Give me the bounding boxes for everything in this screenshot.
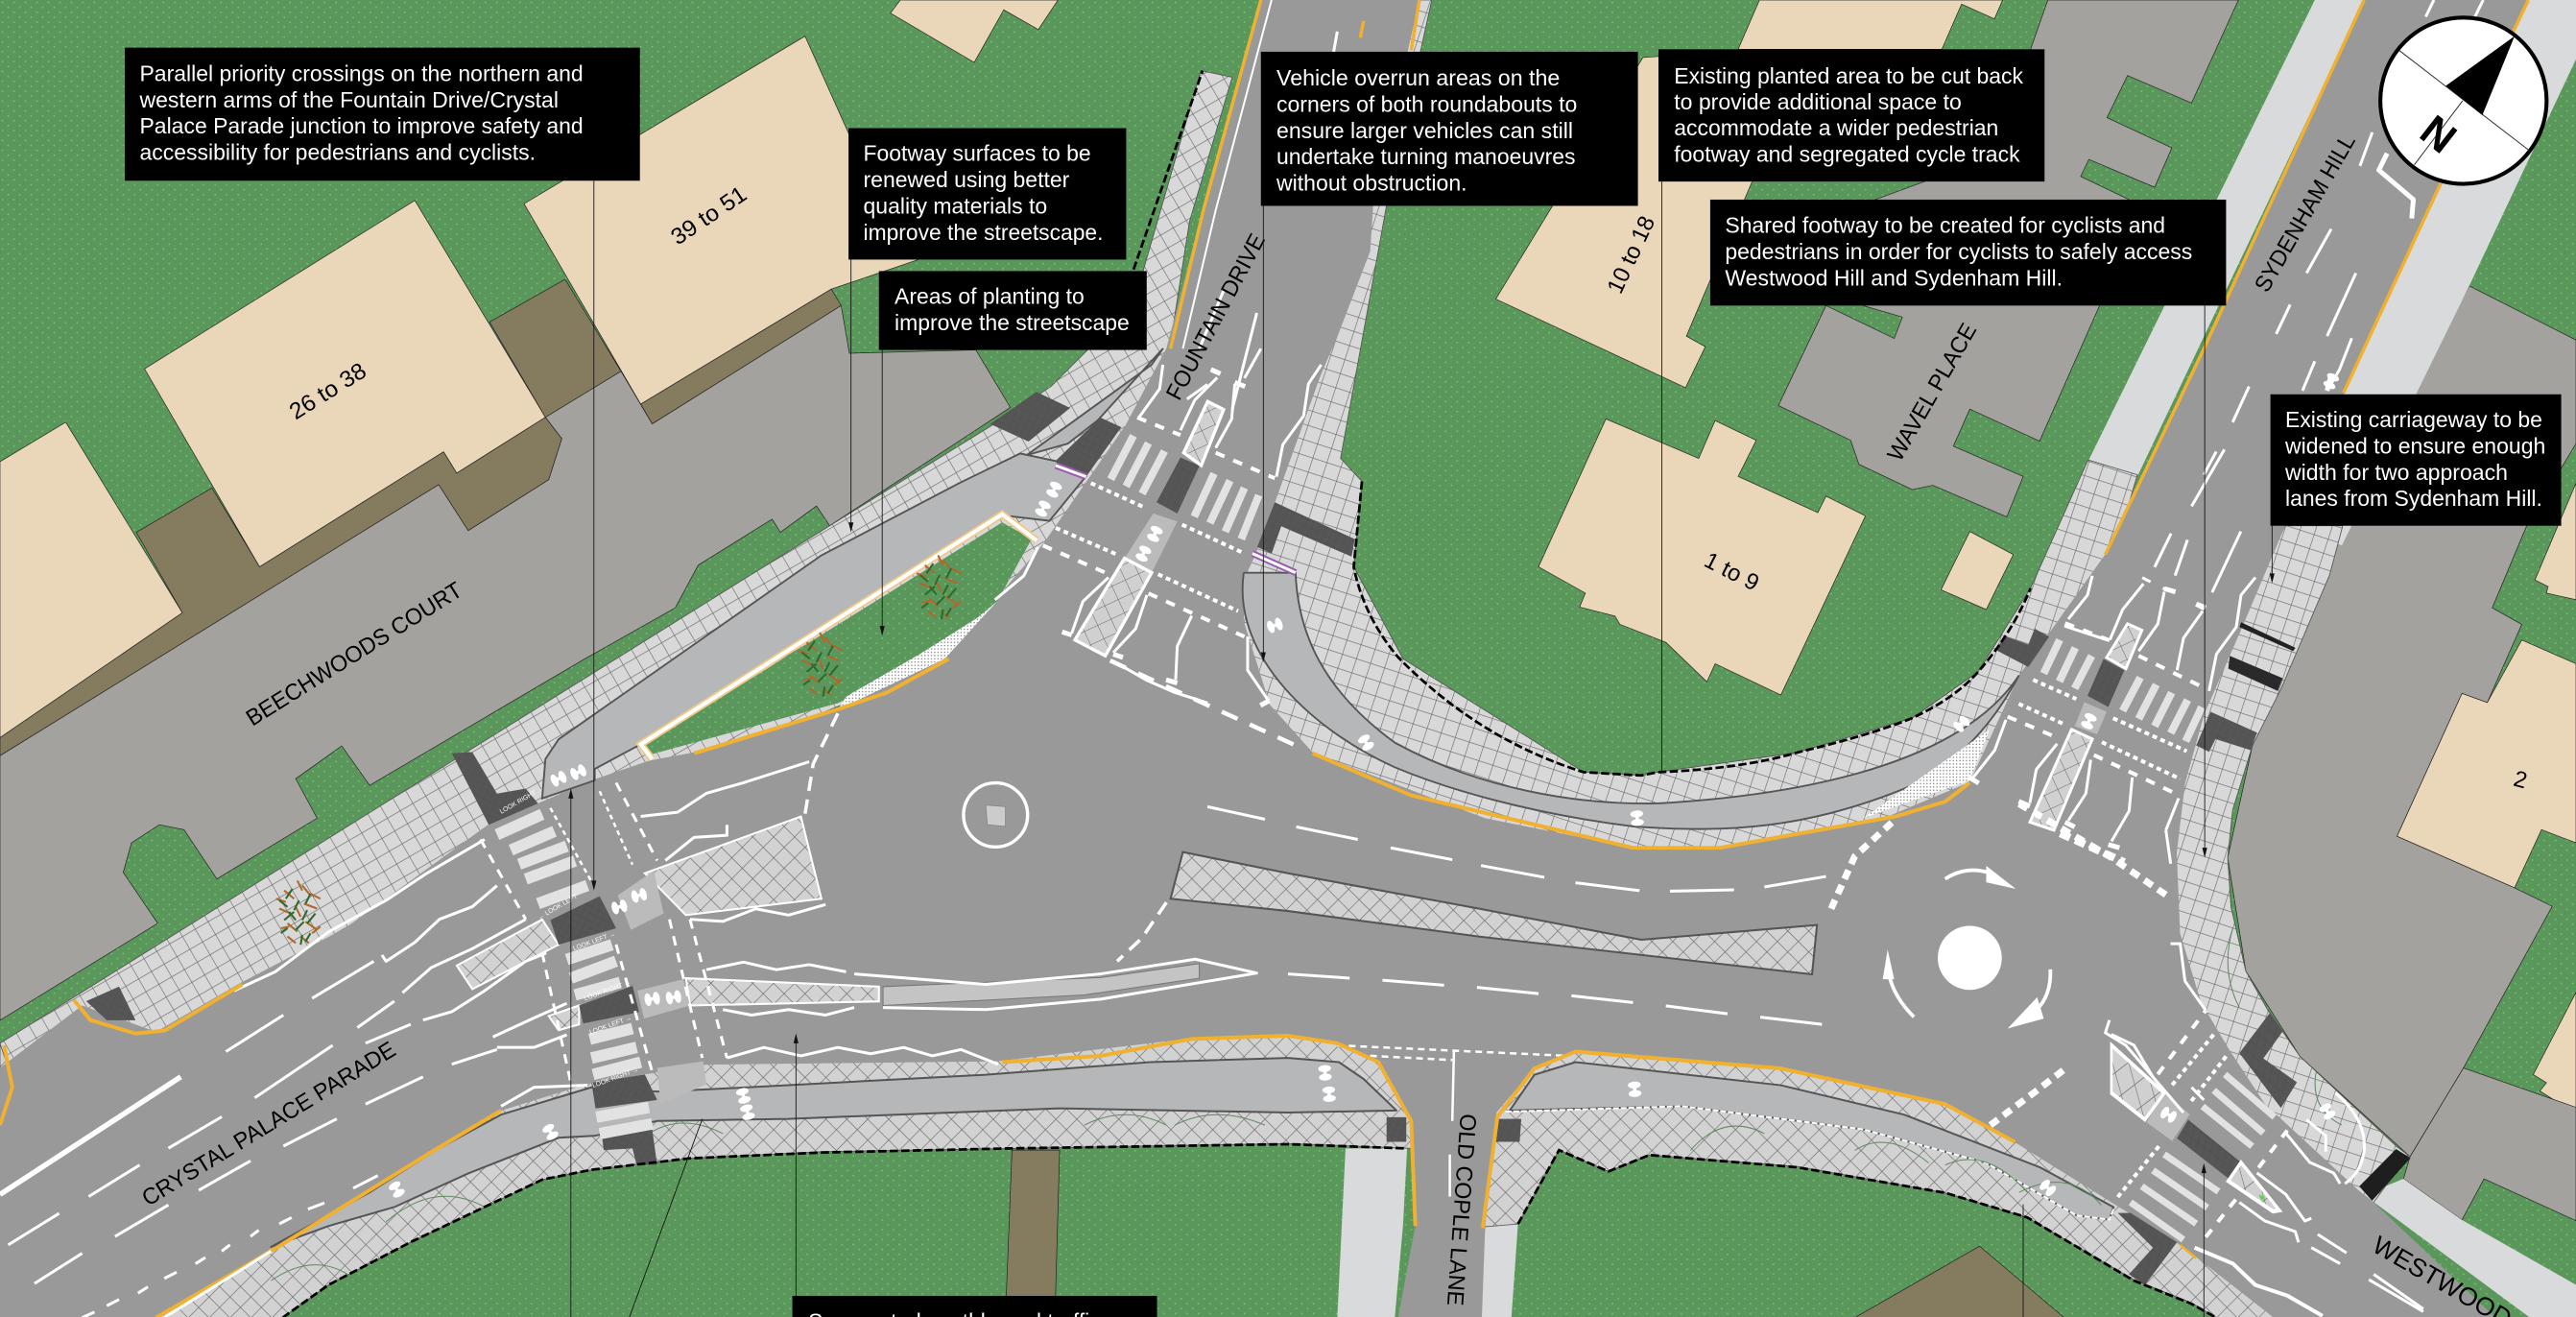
crossing labels: LOOK RIGHT → <box>499 785 544 816</box>
callout: vehicle overrun areas <box>1261 52 1638 205</box>
callout: footway surfaces: renewed using better <box>864 167 1070 192</box>
crossing labels: LOOK RIGHT → <box>591 1066 639 1090</box>
callout: vehicle overrun areas: corners of both roundabouts to <box>1276 91 1577 116</box>
callout: shared footway: pedestrians in order for cyclists to safely access <box>1725 239 2192 264</box>
callout: existing planted area <box>1658 49 2044 181</box>
callout: existing carriageway widened: lanes from Sydenham Hill. <box>2285 486 2542 511</box>
callout: shared footway: Shared footway to be created for cyclists and <box>1725 213 2165 238</box>
west mini-roundabout <box>964 783 1028 847</box>
crossing labels: LOOK LEFT → <box>572 931 616 952</box>
street and property labels: 39 to 51 <box>666 181 751 251</box>
street and property labels: CRYSTAL PALACE PARADE <box>137 1037 400 1211</box>
tiny hatch north-east of splitter <box>1863 730 1990 818</box>
tree: planting east <box>917 556 961 619</box>
callout: parallel priority crossings: western arms of the Fountain Drive/Crystal <box>138 87 559 112</box>
brown access strips <box>0 279 2064 1317</box>
street and property labels: 1 to 9 <box>1700 547 1763 596</box>
leader lines with arrowheads <box>568 180 2275 1317</box>
cycle symbols <box>388 371 2340 1199</box>
west crossings tactile paving <box>86 753 1521 1165</box>
compass <box>2380 17 2546 184</box>
callout: parallel priority crossings: Palace Parade junction to improve safety and <box>139 113 584 138</box>
street and property labels: WAVEL PLACE <box>1882 319 1982 466</box>
street and property labels: FOUNTAIN DRIVE <box>1161 229 1271 404</box>
crossing markings: Fountain Drive arm <box>990 365 1355 746</box>
cycle tracks <box>542 348 2019 829</box>
planting bed with hatching <box>641 515 1037 759</box>
callout: footway surfaces <box>848 129 1126 259</box>
callout: existing planted area: accommodate a wider pedestrian <box>1674 115 1998 140</box>
callout: vehicle overrun areas: without obstruction. <box>1276 171 1467 196</box>
callout: parallel priority crossings: accessibility for pedestrians and cyclists. <box>139 140 536 165</box>
verges <box>1337 0 2576 1317</box>
road markings: north arms <box>1333 0 2528 640</box>
crossing markings: Westwood Hill arm <box>2111 927 2423 1316</box>
callout: parallel priority crossings <box>125 48 640 180</box>
callout: clipped bottom note <box>793 1296 1157 1317</box>
tree: planting west <box>799 633 843 697</box>
callout: existing planted area: footway and segregated cycle track <box>1674 142 2020 167</box>
street and property labels: 10 to 18 <box>1602 212 1660 298</box>
proposed boundary dashed lines <box>282 71 2216 1317</box>
street and property labels: 26 to 38 <box>285 358 371 425</box>
callout: shared footway: Westwood Hill and Sydenham Hill. <box>1725 265 2063 290</box>
callout: existing carriageway widened: widened to ensure enough <box>2284 433 2545 458</box>
compass: N <box>2411 107 2465 163</box>
callout: footway surfaces: improve the streetscape. <box>864 220 1103 245</box>
splitter island between roundabouts <box>1171 852 1817 974</box>
east mini-roundabout <box>1883 866 2050 1028</box>
street and property labels: SYDENHAM HILL <box>2250 130 2361 297</box>
crossing labels: LOOK RIGHT → <box>584 979 632 1002</box>
street and property labels: OLD COPLE LANE <box>1442 1113 1481 1306</box>
street and property labels: 2 <box>2511 766 2530 794</box>
west zebra stripes <box>497 814 653 1134</box>
callout: footway surfaces: quality materials to <box>864 194 1047 219</box>
callout: existing planted area: Existing planted area to be cut back <box>1674 63 2024 88</box>
crossing labels: ← LOOK LEFT <box>537 893 580 922</box>
callout: existing carriageway widened <box>2271 395 2562 526</box>
callout: areas of planting: improve the streetscape <box>894 310 1130 335</box>
callout: areas of planting <box>879 271 1147 350</box>
road markings and kerbs: east half <box>1288 754 2204 1228</box>
crossing markings: Sydenham Hill arm <box>1969 576 2296 864</box>
callout: parallel priority crossings: Parallel priority crossings on the northern and <box>139 60 584 85</box>
callout: existing carriageway widened: Existing carriageway to be <box>2285 407 2542 432</box>
street and property labels: BEECHWOODS COURT <box>242 577 467 731</box>
callout: areas of planting: Areas of planting to <box>894 284 1085 309</box>
callout: footway surfaces: Footway surfaces to be <box>864 141 1091 166</box>
pale central island strip <box>883 964 1200 1005</box>
callout: vehicle overrun areas: Vehicle overrun areas on the <box>1276 65 1560 90</box>
callout: shared footway <box>1710 200 2226 305</box>
callout: existing planted area: to provide additional space to <box>1674 89 1962 114</box>
cycle crossing strips west <box>618 871 706 1104</box>
callout: existing carriageway widened: width for two approach <box>2284 460 2508 485</box>
crossing labels: LOOK LEFT → <box>588 1015 632 1037</box>
callout: vehicle overrun areas: ensure larger vehicles can still <box>1276 118 1573 143</box>
callout: vehicle overrun areas: undertake turning manoeuvres <box>1276 144 1576 169</box>
west roundabout islands <box>457 817 879 1030</box>
road markings and kerbs: west half <box>0 658 1288 1317</box>
crossing labels <box>499 785 639 1090</box>
south cycle tracks <box>271 1058 1396 1284</box>
tree: footway <box>276 880 321 945</box>
